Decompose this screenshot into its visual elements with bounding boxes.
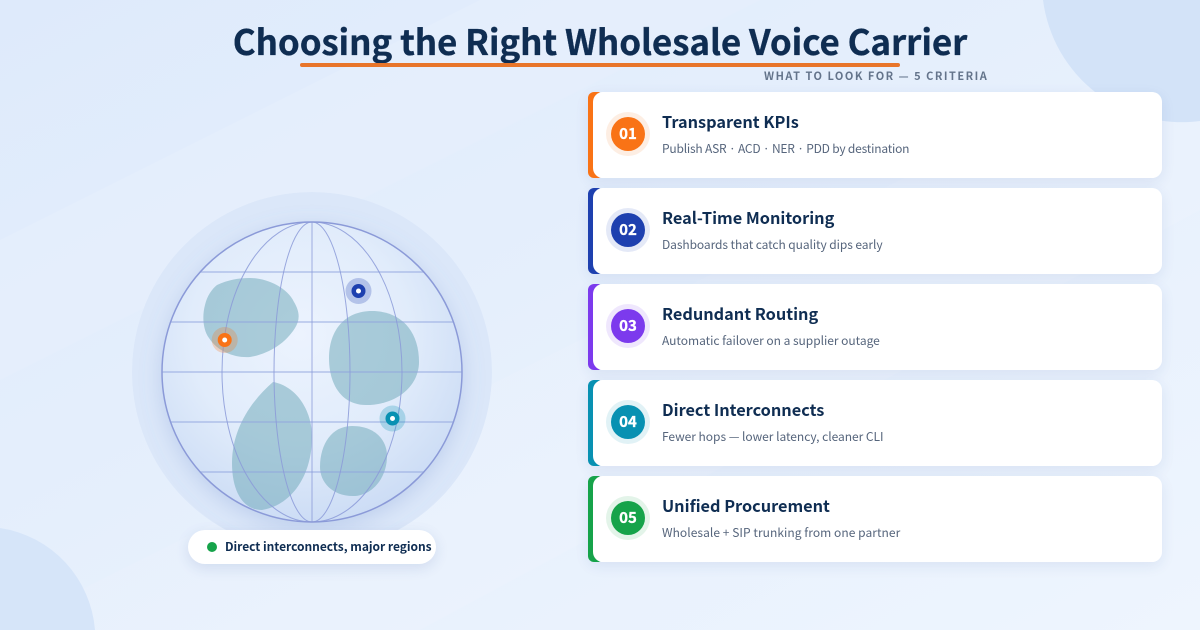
meridians: [222, 222, 402, 522]
card 02: [588, 188, 1162, 274]
badge 03: [606, 304, 650, 348]
badge 05: [606, 496, 650, 540]
title underline: [300, 62, 900, 67]
card 04: 04: [619, 411, 637, 432]
badge 02: [606, 208, 650, 252]
legend pill: [188, 530, 436, 564]
card 03: 03: [619, 315, 637, 336]
legend dot: [207, 542, 217, 552]
badge 04: [606, 400, 650, 444]
description 02: Dashboards that catch quality dips early: [662, 236, 882, 252]
heading 05: Unified Procurement: [662, 493, 830, 517]
card 01: [588, 92, 1162, 178]
badge 01: [606, 112, 650, 156]
description 05: Wholesale + SIP trunking from one partner: [662, 524, 900, 540]
card 05: [588, 476, 1162, 562]
heading 03: Redundant Routing: [662, 301, 818, 325]
subtitle: WHAT TO LOOK FOR — 5 CRITERIA: [764, 68, 988, 84]
card 03: [588, 284, 1162, 370]
latitude lines: [160, 272, 464, 472]
card 05: 05: [619, 507, 637, 528]
description 01: Publish ASR · ACD · NER · PDD by destination: [662, 140, 909, 156]
description 04: Fewer hops — lower latency, cleaner CLI: [662, 428, 884, 444]
globe: [132, 192, 492, 530]
description 03: Automatic failover on a supplier outage: [662, 332, 880, 348]
heading 01: Transparent KPIs: [662, 109, 799, 133]
pin: blue: [346, 278, 372, 304]
legend text: Direct interconnects, major regions: [225, 538, 432, 555]
title: Choosing the Right Wholesale Voice Carrier: [233, 14, 967, 66]
pin: teal: [380, 406, 406, 432]
card 01: 01: [619, 123, 637, 144]
card 02: 02: [619, 219, 637, 240]
heading 04: Direct Interconnects: [662, 397, 824, 421]
globe halo: [132, 192, 492, 552]
heading 02: Real-Time Monitoring: [662, 205, 834, 229]
pin: orange: [212, 327, 238, 353]
globe outline: [162, 222, 462, 522]
globe sphere: [162, 222, 462, 522]
continents: [203, 278, 419, 510]
card 04: [588, 380, 1162, 466]
